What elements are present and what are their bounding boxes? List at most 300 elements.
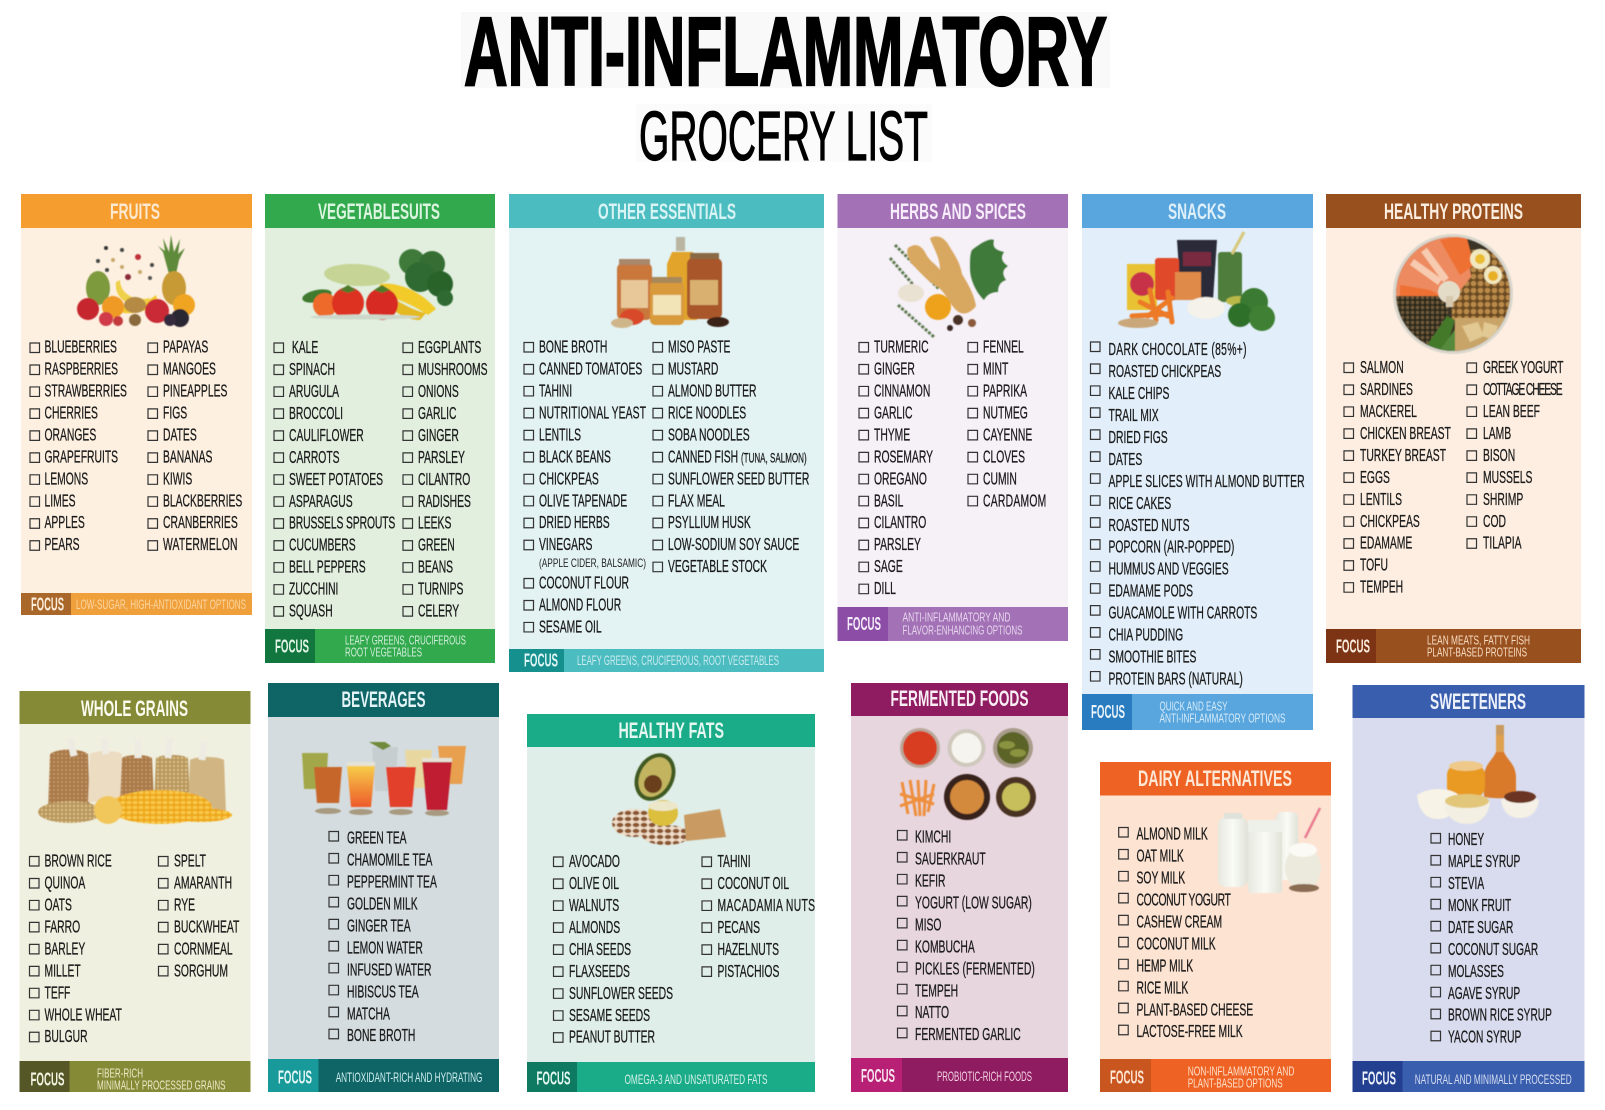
checklist: whole grains column 2: BUCKWHEAT: [174, 918, 239, 937]
checklist: proteins column 2: LEAN BEEF: [1483, 402, 1540, 422]
heading: fruits: FRUITS: [110, 199, 160, 224]
checklist: sweeteners: HONEY: [1448, 830, 1484, 850]
checklist: proteins column 1: SARDINES: [1360, 380, 1413, 400]
checklist: fermented foods: MISO: [915, 916, 941, 935]
checklist: proteins column 1: LENTILS: [1360, 490, 1402, 510]
heading: beverages: BEVERAGES: [342, 687, 426, 712]
checklist: dairy alternatives: OAT MILK: [1136, 847, 1184, 866]
icon: fruit pile: [77, 235, 195, 327]
panel: healthy fats: [527, 714, 815, 1092]
checklist: herbs column 2: PAPRIKA: [983, 382, 1027, 401]
checklist: dairy alternatives: COCONUT YOGURT: [1136, 891, 1231, 910]
focus: beverages: [268, 1059, 499, 1092]
checklist: vegetables column 1: [274, 338, 395, 622]
focus: snacks: ANTI-INFLAMMATORY OPTIONS: [1160, 711, 1286, 726]
checklist: vegetables column 2: GINGER: [418, 426, 459, 446]
checklist: vegetables column 1: KALE: [292, 338, 318, 358]
panel: other essentials: [509, 194, 824, 672]
checklist: whole grains column 1: OATS: [44, 896, 72, 915]
checklist: proteins column 1: MACKEREL: [1360, 402, 1417, 422]
checklist: whole grains column 1: BROWN RICE: [44, 852, 112, 871]
checklist: other essentials column 1: TAHINI: [539, 382, 572, 401]
checklist: herbs column 1: THYME: [874, 426, 910, 445]
checklist: other essentials column 1: CANNED TOMATOES: [539, 360, 642, 379]
focus: beverages: FOCUS: [278, 1068, 312, 1088]
checklist: fruits column 2: PINEAPPLES: [163, 382, 228, 401]
checklist: vegetables column 2: ONIONS: [418, 382, 459, 402]
checklist: fruits column 1: [30, 338, 127, 555]
focus: whole grains: [20, 1061, 250, 1093]
checklist: herbs column 1: TURMERIC: [874, 338, 929, 357]
focus: whole grains: MINIMALLY PROCESSED GRAINS: [97, 1078, 226, 1093]
checklist: proteins column 1: EDAMAME: [1360, 534, 1412, 554]
checklist: fruits column 2: WATERMELON: [163, 536, 238, 555]
checklist: fermented foods: YOGURT (LOW SUGAR): [915, 894, 1032, 913]
checklist: healthy fats column 1: WALNUTS: [569, 896, 619, 916]
checklist: proteins column 2: TILAPIA: [1483, 534, 1522, 554]
heading: snacks: [1082, 194, 1313, 228]
checklist: fruits column 1: RASPBERRIES: [44, 360, 118, 379]
icon: fermented food bowls: [900, 728, 1036, 820]
checklist: vegetables column 2: TURNIPS: [418, 580, 464, 600]
focus: vegetables: LEAFY GREENS, CRUCIFEROUS: [345, 633, 466, 648]
panel: snacks: [1082, 194, 1313, 730]
focus: healthy fats: FOCUS: [536, 1068, 570, 1088]
checklist: herbs column 2: CLOVES: [983, 448, 1025, 467]
checklist: other essentials column 2: RICE NOODLES: [668, 404, 746, 423]
checklist: vegetables column 1: ZUCCHINI: [289, 580, 338, 600]
checklist: sweeteners: BROWN RICE SYRUP: [1448, 1006, 1552, 1026]
checklist: healthy fats column 1: CHIA SEEDS: [569, 940, 631, 960]
checklist: healthy fats column 1: ALMONDS: [569, 918, 620, 938]
checklist: sweeteners: MONK FRUIT: [1448, 896, 1511, 916]
checklist: snacks: GUACAMOLE WITH CARROTS: [1108, 604, 1257, 624]
panel: herbs and spices: [838, 194, 1068, 641]
checklist: beverages: INFUSED WATER: [347, 961, 431, 980]
checklist: whole grains column 1: QUINOA: [44, 874, 85, 893]
focus: snacks: [1082, 694, 1313, 730]
checklist: whole grains column 1: BARLEY: [44, 940, 85, 959]
checklist: beverages: PEPPERMINT TEA: [347, 873, 437, 892]
checklist: snacks: TRAIL MIX: [1108, 406, 1159, 426]
checklist: vegetables column 2: CELERY: [418, 602, 459, 622]
checklist: other essentials column 1: CHICKPEAS: [539, 470, 599, 489]
checklist: whole grains column 1: WHOLE WHEAT: [44, 1006, 122, 1025]
checklist: fruits column 2: BLACKBERRIES: [163, 492, 242, 511]
checklist: healthy fats column 2: PECANS: [718, 918, 760, 938]
checklist: dairy alternatives: RICE MILK: [1136, 979, 1188, 998]
checklist: beverages: CHAMOMILE TEA: [347, 851, 433, 870]
checklist: healthy fats column 1: OLIVE OIL: [569, 874, 619, 894]
checklist: vegetables column 1: SQUASH: [289, 602, 333, 622]
checklist: sweeteners: [1431, 830, 1552, 1048]
focus: sweeteners: FOCUS: [1362, 1068, 1396, 1088]
checklist: other essentials column 1: SESAME OIL: [539, 618, 602, 637]
checklist: herbs column 2: [968, 338, 1047, 511]
subtitle: GROCERY LIST: [639, 97, 928, 175]
checklist: fruits column 2: BANANAS: [163, 448, 213, 467]
checklist: herbs column 1: CINNAMON: [874, 382, 930, 401]
checklist: dairy alternatives: HEMP MILK: [1136, 957, 1193, 976]
checklist: beverages: GINGER TEA: [347, 917, 411, 936]
focus: healthy proteins: FOCUS: [1336, 636, 1370, 656]
heading: fermented foods: FERMENTED FOODS: [890, 686, 1028, 711]
heading: fruits: [21, 194, 252, 228]
checklist: sweeteners: STEVIA: [1448, 874, 1484, 894]
checklist: snacks: [1090, 340, 1305, 689]
focus: healthy proteins: [1326, 629, 1581, 663]
checklist: fruits column 2: PAPAYAS: [163, 338, 208, 357]
focus: herbs and spices: ANTI-INFLAMMATORY AND: [902, 610, 1010, 625]
focus: sweeteners: [1352, 1061, 1584, 1092]
heading: healthy fats: HEALTHY FATS: [618, 718, 724, 743]
checklist: herbs column 1: [859, 338, 933, 599]
checklist: proteins column 2: MUSSELS: [1483, 468, 1533, 488]
heading: vegetables: VEGETABLESUITS: [318, 199, 440, 224]
checklist: herbs column 2: CAYENNE: [983, 426, 1032, 445]
checklist: healthy fats column 1: SUNFLOWER SEEDS: [569, 984, 673, 1004]
checklist: proteins column 2: GREEK YOGURT: [1483, 358, 1563, 378]
checklist: whole grains column 2: [158, 852, 239, 981]
checklist: snacks: HUMMUS AND VEGGIES: [1108, 560, 1229, 580]
checklist: fruits column 1: STRAWBERRIES: [44, 382, 127, 401]
checklist: other essentials column 2: LOW-SODIUM SOY SAUCE: [668, 536, 799, 555]
checklist: healthy fats column 1: AVOCADO: [569, 852, 620, 872]
checklist: whole grains column 2: RYE: [174, 896, 195, 915]
checklist: beverages: LEMON WATER: [347, 939, 423, 958]
checklist: whole grains column 1: BULGUR: [44, 1028, 88, 1047]
focus: whole grains: FIBER-RICH: [97, 1066, 143, 1081]
checklist: proteins column 2: LAMB: [1483, 424, 1511, 444]
checklist: snacks: SMOOTHIE BITES: [1108, 648, 1197, 667]
checklist: other essentials column 1: COCONUT FLOUR: [539, 574, 629, 593]
checklist: snacks: RICE CAKES: [1108, 494, 1171, 514]
icon: jars and bottle: [611, 237, 729, 328]
checklist: sweeteners: YACON SYRUP: [1448, 1028, 1521, 1048]
checklist: vegetables column 1: SWEET POTATOES: [289, 470, 383, 490]
checklist: whole grains column 2: AMARANTH: [174, 874, 232, 893]
checklist: healthy fats column 1: SESAME SEEDS: [569, 1006, 650, 1026]
checklist: healthy fats column 2: COCONUT OIL: [718, 874, 789, 894]
checklist: proteins column 2: SHRIMP: [1483, 490, 1523, 510]
heading: healthy proteins: [1326, 194, 1581, 228]
checklist: other essentials column 1: BONE BROTH: [539, 338, 607, 357]
checklist: fruits column 2: CRANBERRIES: [163, 514, 238, 533]
checklist: proteins column 1: CHICKEN BREAST: [1360, 424, 1451, 444]
focus: fermented foods: PROBIOTIC-RICH FOODS: [937, 1068, 1032, 1084]
checklist: fruits column 1: BLUEBERRIES: [44, 338, 117, 357]
focus: herbs and spices: [838, 607, 1068, 641]
panel: healthy proteins: [1326, 194, 1581, 663]
checklist: healthy fats column 2: MACADAMIA NUTS: [718, 896, 815, 916]
checklist: herbs column 1: GARLIC: [874, 404, 913, 423]
checklist: herbs column 1: PARSLEY: [874, 536, 921, 555]
checklist: fruits column 1: GRAPEFRUITS: [44, 448, 118, 467]
checklist: healthy fats column 2: TAHINI: [718, 852, 751, 872]
checklist: fruits column 1: APPLES: [44, 514, 85, 533]
checklist: vegetables column 2: MUSHROOMS: [418, 360, 488, 380]
checklist: vegetables column 1: BROCCOLI: [289, 404, 343, 424]
checklist: herbs column 1: CILANTRO: [874, 514, 926, 533]
checklist: other essentials column 1: VINEGARS: [539, 536, 593, 555]
panel: fermented foods: [851, 683, 1068, 1092]
checklist: fermented foods: PICKLES (FERMENTED): [915, 960, 1035, 979]
checklist: proteins column 1: CHICKPEAS: [1360, 512, 1420, 532]
checklist: snacks: PROTEIN BARS (NATURAL): [1108, 670, 1243, 689]
heading: snacks: SNACKS: [1168, 199, 1226, 224]
focus: fruits: FOCUS: [31, 594, 64, 614]
checklist: beverages: GOLDEN MILK: [347, 895, 418, 914]
focus: healthy proteins: LEAN MEATS, FATTY FISH: [1427, 633, 1530, 648]
focus: healthy proteins: PLANT-BASED PROTEINS: [1427, 645, 1527, 660]
focus: healthy fats: [527, 1062, 815, 1092]
focus: herbs and spices: FOCUS: [847, 614, 881, 634]
checklist: beverages: GREEN TEA: [347, 829, 407, 848]
checklist: dairy alternatives: SOY MILK: [1136, 869, 1185, 888]
checklist: vegetables column 1: CAULIFLOWER: [289, 426, 364, 446]
icon: milk glasses and jar: [1218, 808, 1321, 893]
title: ANTI-INFLAMMATORY: [464, 0, 1107, 106]
focus: fermented foods: [851, 1058, 1068, 1092]
checklist: healthy fats column 2: PISTACHIOS: [718, 962, 780, 982]
checklist: vegetables column 2: EGGPLANTS: [418, 338, 481, 358]
checklist: vegetables column 1: BRUSSELS SPROUTS: [289, 514, 395, 534]
heading: other essentials: OTHER ESSENTIALS: [598, 199, 736, 224]
focus: other essentials: LEAFY GREENS, CRUCIFEROUS, ROOT VEGETABLES: [577, 652, 779, 668]
checklist: proteins column 1: SALMON: [1360, 358, 1404, 378]
panel: beverages: [268, 683, 499, 1092]
checklist: dairy alternatives: CASHEW CREAM: [1136, 913, 1222, 932]
checklist: sweeteners: MOLASSES: [1448, 962, 1504, 982]
focus: vegetables: [265, 629, 495, 663]
heading: vegetables: [265, 194, 495, 228]
checklist: proteins column 2: COD: [1483, 512, 1506, 532]
checklist: sweeteners: DATE SUGAR: [1448, 918, 1513, 938]
checklist: other essentials column 1: LENTILS: [539, 426, 581, 445]
icon: avocado, oil and nuts: [612, 746, 726, 845]
heading: dairy alternatives: DAIRY ALTERNATIVES: [1138, 766, 1292, 791]
checklist: vegetables column 1: BELL PEPPERS: [289, 558, 366, 578]
panel: fruits: [21, 194, 252, 615]
checklist: other essentials column 1: ALMOND FLOUR: [539, 596, 621, 615]
icon: sweeteners and bottle: [1417, 725, 1539, 824]
checklist: fruits column 1: CHERRIES: [44, 404, 98, 423]
checklist: whole grains column 1: TEFF: [44, 984, 70, 1003]
checklist: other essentials column 2: VEGETABLE STOCK: [668, 557, 767, 577]
checklist: healthy fats column 1: PEANUT BUTTER: [569, 1028, 655, 1048]
panel: whole grains: [20, 691, 250, 1093]
checklist: dairy alternatives: LACTOSE-FREE MILK: [1136, 1023, 1243, 1042]
checklist: other essentials column 2: FLAX MEAL: [668, 492, 725, 511]
checklist: healthy fats column 2: [702, 852, 815, 982]
checklist: proteins column 1: EGGS: [1360, 468, 1390, 488]
checklist: proteins column 1: TURKEY BREAST: [1360, 446, 1446, 466]
checklist: fruits column 2: MANGOES: [163, 360, 216, 379]
checklist: herbs column 1: ROSEMARY: [874, 448, 933, 467]
checklist: beverages: [329, 829, 437, 1046]
checklist: whole grains column 2: SORGHUM: [174, 962, 228, 981]
checklist: snacks: DRIED FIGS: [1108, 428, 1168, 448]
heading: healthy proteins: HEALTHY PROTEINS: [1384, 199, 1523, 224]
focus: other essentials: [509, 649, 824, 672]
checklist: other essentials column 1: DRIED HERBS: [539, 514, 610, 533]
checklist: fermented foods: NATTO: [915, 1004, 949, 1023]
checklist: vegetables column 1: ARUGULA: [289, 382, 339, 402]
heading: whole grains: [20, 691, 250, 724]
heading: sweeteners: [1352, 685, 1584, 718]
checklist: healthy fats column 1: FLAXSEEDS: [569, 962, 630, 982]
checklist: vegetables column 2: LEEKS: [418, 514, 451, 534]
checklist: sweeteners: COCONUT SUGAR: [1448, 940, 1538, 960]
checklist: other essentials column 2: SUNFLOWER SEED BUTTER: [668, 470, 809, 489]
checklist: fermented foods: KOMBUCHA: [915, 938, 975, 957]
checklist: other essentials column 1: NUTRITIONAL YEAST: [539, 404, 646, 423]
checklist: whole grains column 1: FARRO: [44, 918, 80, 937]
heading: whole grains: WHOLE GRAINS: [81, 696, 188, 721]
checklist: fruits column 2: [148, 338, 242, 555]
checklist: fermented foods: KEFIR: [915, 872, 945, 891]
checklist: proteins column 2: COTTAGE CHEESE: [1483, 380, 1563, 400]
checklist: vegetables column 2: GARLIC: [418, 404, 457, 424]
panel: dairy alternatives: [1100, 762, 1331, 1092]
focus: vegetables: ROOT VEGETABLES: [345, 645, 422, 660]
checklist: herbs column 2: CUMIN: [983, 470, 1017, 489]
checklist: herbs column 2: FENNEL: [983, 338, 1024, 357]
checklist: beverages: BONE BROTH: [347, 1027, 415, 1046]
focus: dairy alternatives: FOCUS: [1110, 1068, 1144, 1088]
checklist: fermented foods: FERMENTED GARLIC: [915, 1026, 1021, 1045]
checklist: other essentials column 2: MISO PASTE: [668, 338, 731, 357]
heading: beverages: [268, 683, 499, 717]
checklist: vegetables column 2: CILANTRO: [418, 470, 470, 490]
checklist: other essentials column 1: OLIVE TAPENADE: [539, 492, 627, 511]
checklist: beverages: HIBISCUS TEA: [347, 983, 419, 1002]
icon: grain bags: [38, 738, 232, 824]
checklist: snacks: ROASTED NUTS: [1108, 516, 1190, 536]
icon: row of drinks: [302, 742, 466, 816]
checklist: whole grains column 1: MILLET: [44, 962, 81, 981]
checklist: proteins column 1: TOFU: [1360, 556, 1388, 576]
checklist: sweeteners: AGAVE SYRUP: [1448, 984, 1520, 1004]
checklist: fermented foods: TEMPEH: [915, 982, 958, 1001]
checklist: other essentials column 2: SOBA NOODLES: [668, 426, 750, 445]
checklist: proteins column 2: BISON: [1483, 446, 1515, 466]
focus: vegetables: FOCUS: [275, 636, 309, 656]
focus: beverages: ANTIOXIDANT-RICH AND HYDRATING: [336, 1069, 482, 1085]
checklist: herbs column 1: GINGER: [874, 360, 915, 379]
focus: whole grains: FOCUS: [30, 1070, 64, 1090]
heading: fermented foods: [851, 683, 1068, 716]
checklist: fermented foods: KIMCHI: [915, 828, 951, 847]
checklist: vegetables column 1: CARROTS: [289, 448, 340, 468]
panel: sweeteners: [1352, 685, 1584, 1092]
checklist: other essentials column 2: ALMOND BUTTER: [668, 382, 757, 401]
focus: snacks: QUICK AND EASY: [1160, 699, 1228, 714]
checklist: snacks: DARK CHOCOLATE (85%+): [1108, 340, 1247, 360]
panel: vegetables: [265, 194, 495, 663]
checklist: snacks: KALE CHIPS: [1108, 384, 1170, 404]
icon: ginger and herbs: [890, 236, 1008, 337]
title: [461, 0, 1110, 106]
focus: dairy alternatives: [1100, 1059, 1331, 1092]
checklist: other essentials column 1: [524, 338, 646, 637]
focus: herbs and spices: FLAVOR-ENHANCING OPTIONS: [902, 623, 1023, 638]
checklist: herbs column 1: OREGANO: [874, 470, 927, 489]
icon: protein bowl: [1393, 234, 1513, 354]
checklist: snacks: ROASTED CHICKPEAS: [1108, 362, 1221, 382]
focus: dairy alternatives: PLANT-BASED OPTIONS: [1188, 1076, 1283, 1091]
checklist: herbs column 2: CARDAMOM: [983, 492, 1047, 511]
heading: sweeteners: SWEETENERS: [1430, 689, 1526, 714]
heading: healthy fats: [527, 714, 815, 747]
checklist: herbs column 1: SAGE: [874, 557, 903, 577]
checklist: proteins column 2: [1467, 358, 1563, 554]
focus: fermented foods: FOCUS: [861, 1066, 895, 1086]
checklist: dairy alternatives: ALMOND MILK: [1136, 825, 1208, 844]
checklist: vegetables column 2: BEANS: [418, 558, 453, 578]
checklist: whole grains column 2: SPELT: [174, 852, 206, 871]
checklist: vegetables column 2: PARSLEY: [418, 448, 465, 468]
heading: dairy alternatives: [1100, 762, 1331, 796]
focus: snacks: FOCUS: [1091, 702, 1125, 722]
focus: dairy alternatives: NON-INFLAMMATORY AND: [1188, 1064, 1294, 1079]
focus: fruits: LOW-SUGAR, HIGH-ANTIOXIDANT OPTIONS: [76, 596, 246, 612]
checklist: snacks: POPCORN (AIR-POPPED): [1108, 538, 1234, 558]
focus: other essentials: FOCUS: [524, 650, 558, 670]
checklist: proteins column 1: TEMPEH: [1360, 578, 1403, 598]
icon: snack assortment: [1118, 232, 1275, 331]
checklist: whole grains column 2: CORNMEAL: [174, 940, 233, 959]
checklist: snacks: CHIA PUDDING: [1108, 626, 1183, 646]
checklist: fermented foods: [898, 828, 1035, 1045]
checklist: other essentials column 2: CANNED FISH (TUNA, SALMON): [668, 448, 807, 467]
checklist: fruits column 2: DATES: [163, 426, 197, 445]
heading: other essentials: [509, 194, 824, 228]
checklist: dairy alternatives: COCONUT MILK: [1136, 935, 1216, 954]
checklist: vegetables column 2: RADISHES: [418, 492, 471, 512]
checklist: fruits column 1: LEMONS: [44, 470, 88, 489]
checklist: vegetables column 1: ASPARAGUS: [289, 492, 353, 512]
icon: vegetable pile: [301, 249, 453, 320]
checklist: healthy fats column 2: HAZELNUTS: [718, 940, 779, 960]
checklist: dairy alternatives: PLANT-BASED CHEESE: [1136, 1001, 1253, 1020]
checklist: herbs column 1: BASIL: [874, 492, 903, 511]
checklist: snacks: APPLE SLICES WITH ALMOND BUTTER: [1108, 472, 1305, 492]
heading: herbs and spices: [838, 194, 1068, 228]
checklist: other essentials column 1: BLACK BEANS: [539, 448, 611, 467]
checklist: other essentials column 2: PSYLLIUM HUSK: [668, 514, 751, 533]
checklist: fruits column 1: PEARS: [44, 536, 80, 555]
checklist: proteins column 1: [1344, 358, 1451, 598]
checklist: vegetables column 1: SPINACH: [289, 360, 335, 380]
checklist: other essentials column 2: [653, 338, 809, 577]
checklist: dairy alternatives: [1119, 825, 1253, 1042]
checklist: fermented foods: SAUERKRAUT: [915, 850, 986, 869]
checklist: fruits column 1: ORANGES: [44, 426, 96, 445]
checklist: beverages: MATCHA: [347, 1005, 390, 1024]
checklist: fruits column 2: KIWIS: [163, 470, 192, 489]
checklist: fruits column 1: LIMES: [44, 492, 76, 511]
focus: healthy fats: OMEGA-3 AND UNSATURATED FATS: [624, 1071, 768, 1087]
checklist: sweeteners: MAPLE SYRUP: [1448, 852, 1520, 872]
checklist: other essentials column 1: (APPLE CIDER, BALSAMIC): [539, 556, 646, 570]
subtitle: [636, 97, 932, 175]
checklist: herbs column 1: DILL: [874, 579, 896, 599]
checklist: other essentials column 2: MUSTARD: [668, 360, 718, 379]
heading: herbs and spices: HERBS AND SPICES: [890, 199, 1026, 224]
checklist: herbs column 2: NUTMEG: [983, 404, 1028, 423]
checklist: healthy fats column 1: [554, 852, 673, 1048]
